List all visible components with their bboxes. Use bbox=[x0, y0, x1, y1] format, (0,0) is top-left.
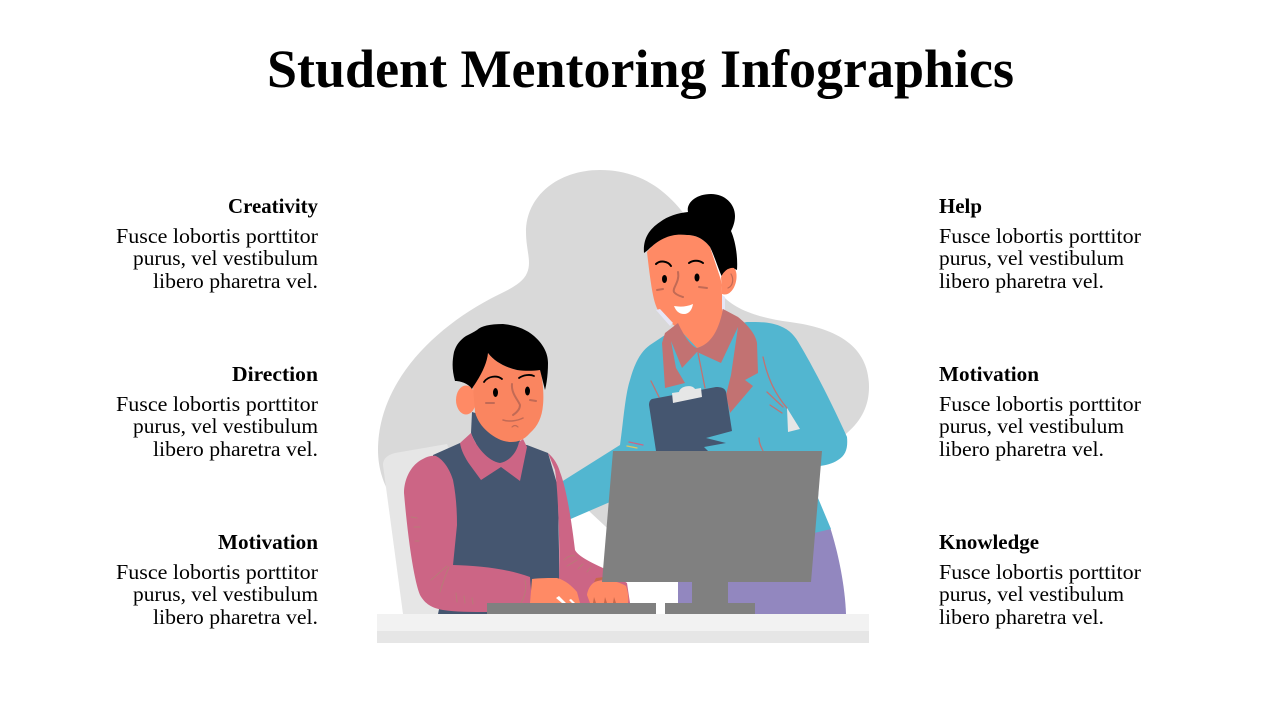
right hand bbox=[587, 580, 628, 603]
text block: Motivation right: Motivation bbox=[939, 362, 1039, 386]
shirt creases bbox=[627, 353, 787, 451]
shirt collar bbox=[460, 433, 527, 481]
text block: Help: purus, vel vestibulum bbox=[939, 246, 1124, 270]
keyboard bbox=[487, 603, 656, 614]
text block: Motivation right: purus, vel vestibulum bbox=[939, 414, 1124, 438]
text block: Motivation left: Motivation bbox=[218, 530, 318, 554]
text block: Motivation right: libero pharetra vel. bbox=[939, 437, 1104, 461]
text block: Motivation left: purus, vel vestibulum bbox=[133, 582, 318, 606]
mentor figure bbox=[558, 194, 847, 614]
text block: Knowledge: purus, vel vestibulum bbox=[939, 582, 1124, 606]
face bbox=[473, 353, 543, 442]
student figure bbox=[404, 324, 630, 614]
text block: Help bbox=[939, 194, 1141, 293]
eyes bbox=[493, 386, 530, 397]
white fold bbox=[787, 408, 800, 432]
right sleeve bbox=[548, 453, 630, 603]
text block: Motivation left: Fusce lobortis porttitor bbox=[116, 560, 318, 584]
clipboard bbox=[649, 387, 732, 451]
title: Student Mentoring Infographics bbox=[267, 39, 1014, 99]
chair bbox=[383, 444, 470, 614]
text block: Direction bbox=[116, 362, 318, 461]
illustration: mentor and student at desk bbox=[377, 170, 869, 643]
text block: Motivation left: libero pharetra vel. bbox=[153, 605, 318, 629]
hair and bun bbox=[644, 194, 737, 277]
text block: Knowledge: libero pharetra vel. bbox=[939, 605, 1104, 629]
text block: Creativity: Creativity bbox=[228, 194, 318, 218]
desk bbox=[377, 614, 869, 643]
vest bbox=[433, 443, 560, 614]
sleeve creases bbox=[411, 517, 591, 604]
text block: Motivation right bbox=[939, 362, 1141, 461]
ear bbox=[721, 268, 737, 294]
text block: Knowledge: Fusce lobortis porttitor bbox=[939, 560, 1141, 584]
text block: Creativity bbox=[116, 194, 318, 293]
blue shirt and arms bbox=[558, 322, 847, 560]
scarf collar bbox=[662, 309, 758, 413]
text block: Motivation left bbox=[116, 530, 318, 629]
text block: Creativity: Fusce lobortis porttitor bbox=[116, 224, 318, 248]
hair bbox=[453, 324, 548, 390]
background blob bbox=[378, 170, 869, 540]
text block: Direction: Direction bbox=[232, 362, 318, 386]
text block: Knowledge: Knowledge bbox=[939, 530, 1039, 554]
trousers bbox=[678, 500, 846, 614]
finger gaps bbox=[556, 596, 575, 603]
text block: Help: libero pharetra vel. bbox=[939, 269, 1104, 293]
text block: Help: Fusce lobortis porttitor bbox=[939, 224, 1141, 248]
face details bbox=[656, 261, 733, 297]
hand shading bbox=[593, 576, 616, 603]
text block: Direction: libero pharetra vel. bbox=[153, 437, 318, 461]
text block: Help: Help bbox=[939, 194, 982, 218]
computer monitor bbox=[602, 451, 822, 614]
left hand bbox=[530, 578, 580, 603]
eyes bbox=[662, 274, 700, 283]
neck bbox=[471, 412, 520, 463]
text block: Direction: purus, vel vestibulum bbox=[133, 414, 318, 438]
text block: Direction: Fusce lobortis porttitor bbox=[116, 392, 318, 416]
text block: Creativity: purus, vel vestibulum bbox=[133, 246, 318, 270]
text block: Knowledge bbox=[939, 530, 1141, 629]
face details bbox=[484, 375, 536, 427]
white collar hint bbox=[656, 295, 725, 326]
smile bbox=[674, 304, 693, 314]
neck and face bbox=[647, 234, 723, 348]
clipboard clip bbox=[672, 386, 702, 403]
text block: Motivation right: Fusce lobortis porttitor bbox=[939, 392, 1141, 416]
text block: Creativity: libero pharetra vel. bbox=[153, 269, 318, 293]
ear bbox=[456, 386, 476, 414]
left sleeve bbox=[404, 456, 532, 612]
